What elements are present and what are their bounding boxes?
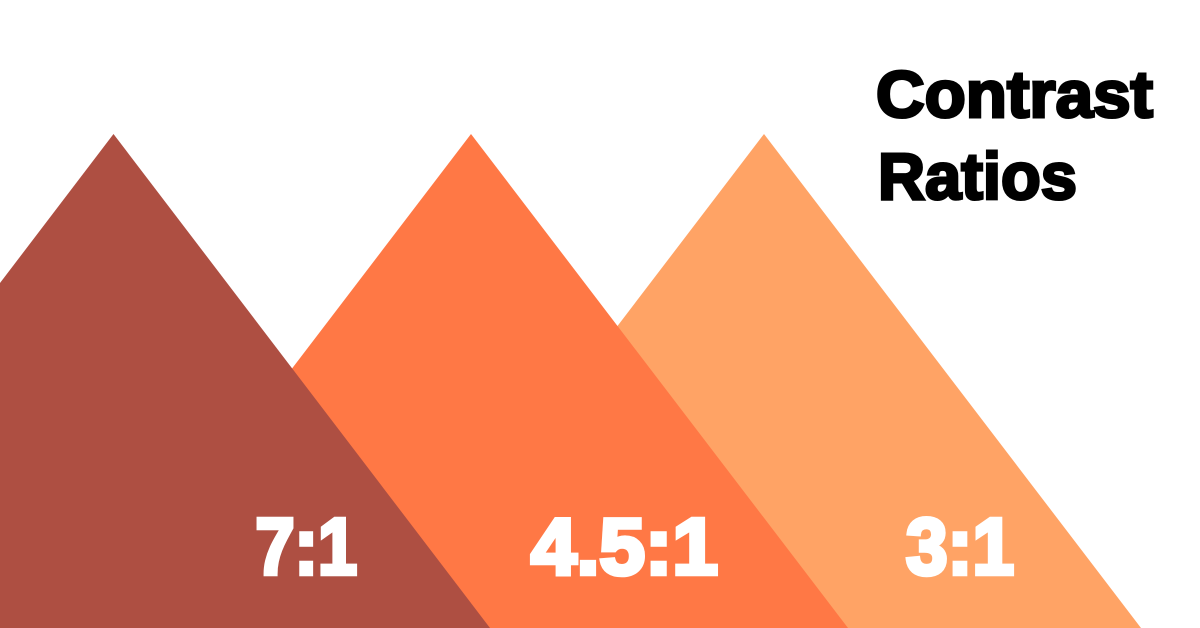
title: Contrast Ratios: Contrast (876, 57, 1153, 131)
label: 3:1: 3:1 (906, 502, 1014, 591)
label: 4.5:1: 4.5:1 (531, 502, 718, 591)
triangle: 7:1 brown (0, 134, 490, 628)
triangle: 4.5:1 orange (94, 134, 848, 628)
title: Contrast Ratios (876, 57, 1153, 213)
triangle: 3:1 light orange (387, 134, 1141, 628)
title: Contrast Ratios: Ratios (878, 139, 1077, 213)
label: 7:1: 7:1 (256, 502, 357, 591)
